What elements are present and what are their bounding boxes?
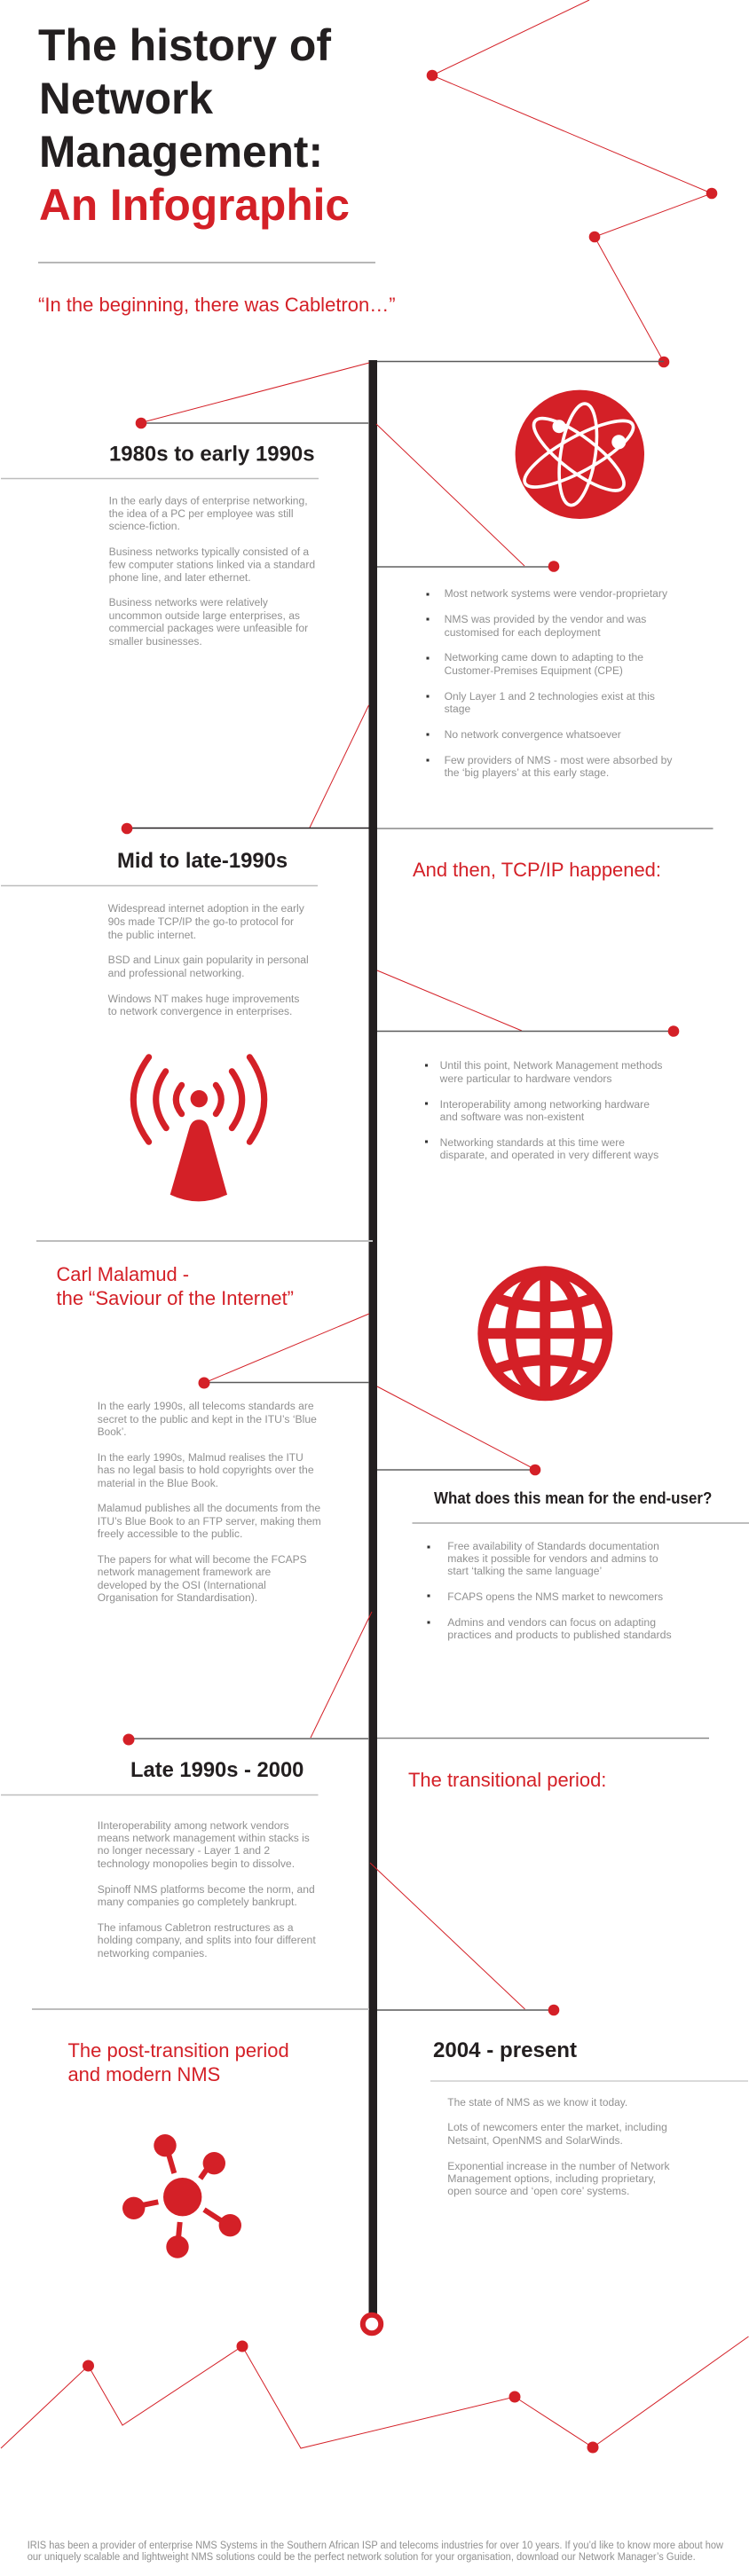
text block: Netsaint, OpenNMS and SolarWinds.: [447, 2136, 623, 2147]
heading: [67, 2039, 289, 2085]
heading: Mid to late-1990s: [117, 849, 288, 873]
title: [38, 20, 350, 230]
text block: means network management within stacks is: [98, 1834, 310, 1844]
bullet list: NMS was provided by the vendor and was: [445, 615, 647, 625]
text block: The infamous Cabletron restructures as a: [98, 1923, 294, 1934]
panel: Carl Malamud: [36, 1241, 373, 1604]
text block: science-fiction.: [109, 522, 180, 532]
icon: network hub: [122, 2134, 241, 2258]
central timeline bar: [369, 360, 377, 2314]
text block: In the early 1990s, Malmud realises the ITU: [98, 1453, 304, 1464]
text block: BSD and Linux gain popularity in personal: [108, 955, 309, 966]
timeline end ring: [363, 2315, 381, 2333]
text block: Lots of newcomers enter the market, including: [447, 2123, 667, 2133]
heading: 2004 - present: [433, 2038, 577, 2062]
bullet list: [425, 1061, 663, 1161]
panel: The post-transition period: [32, 2009, 369, 2258]
text block: Spinoff NMS platforms become the norm, and: [98, 1885, 315, 1896]
bullet list: customised for each deployment: [445, 628, 601, 639]
text block: phone line, and later ethernet.: [109, 573, 251, 584]
text block: Exponential increase in the number of Network: [447, 2162, 670, 2172]
text block: network management framework are: [98, 1567, 271, 1578]
text block: Business networks were relatively: [109, 598, 268, 609]
text block: material in the Blue Book.: [98, 1479, 218, 1489]
bullet list: practices and products to published standards: [447, 1630, 672, 1641]
text block: Book’.: [98, 1427, 127, 1438]
text block: developed by the OSI (International: [98, 1581, 266, 1591]
panel: What does this mean for the end-user?: [377, 1386, 749, 1641]
text block: Widespread internet adoption in the early: [108, 904, 304, 915]
bullet list: Free availability of Standards documentation: [447, 1542, 659, 1552]
text block: [447, 2098, 670, 2197]
text block: smaller businesses.: [109, 637, 202, 648]
heading: The post-transition period: [67, 2039, 289, 2062]
text block: has no legal basis to hold copyrights over the: [98, 1465, 314, 1476]
connector: timeline start: [136, 362, 664, 428]
text block: In the early days of enterprise networking,: [109, 496, 308, 507]
icon: atom: [516, 390, 644, 519]
text block: In the early 1990s, all telecoms standards are: [98, 1402, 314, 1412]
text block: open source and ‘open core’ systems.: [447, 2187, 629, 2197]
bullet list: Few providers of NMS - most were absorbed by: [445, 756, 673, 766]
text block: [108, 904, 309, 1017]
footer text: [28, 2541, 724, 2563]
text block: [109, 496, 315, 648]
panel: The transitional period: [370, 1739, 709, 2015]
bullet list: Until this point, Network Management methods: [440, 1061, 663, 1072]
bullet list: Customer-Premises Equipment (CPE): [445, 666, 623, 677]
text block: Organisation for Standardisation).: [98, 1593, 257, 1604]
text block: ITU’s Blue Book to an FTP server, making them: [98, 1517, 321, 1528]
text block: 90s made TCP/IP the go-to protocol for: [108, 917, 294, 928]
connector: [377, 970, 679, 1037]
text block: the public internet.: [108, 931, 196, 941]
text block: holding company, and splits into four different: [98, 1936, 317, 1946]
heading: Carl Malamud -: [57, 1263, 189, 1285]
footer text: our uniquely scalable and lightweight NMS solutions could be the perfect network solution for your organisation, download our Network Manager’s Guide.: [28, 2552, 696, 2563]
connector: [376, 424, 559, 572]
text block: freely accessible to the public.: [98, 1529, 242, 1540]
bullet list: Networking standards at this time were: [440, 1138, 625, 1149]
text block: networking companies.: [98, 1949, 208, 1959]
heading: The transitional period:: [408, 1769, 606, 1791]
bullet list: were particular to hardware vendors: [439, 1074, 612, 1085]
text block: Windows NT makes huge improvements: [108, 994, 300, 1005]
bullet list: [428, 1542, 672, 1641]
text block: Management options, including proprietary,: [447, 2174, 656, 2185]
panel: 2004 - present: [430, 2038, 748, 2197]
heading: Late 1990s - 2000: [130, 1758, 304, 1782]
connector: [122, 1612, 372, 1746]
text block: Malamud publishes all the documents from the: [98, 1504, 320, 1514]
bullet list: Only Layer 1 and 2 technologies exist at this: [445, 692, 655, 703]
text block: few computer stations linked via a standard: [109, 560, 315, 570]
footer text: IRIS has been a provider of enterprise NMS Systems in the Southern African ISP and telecoms industries for over 10 years. If you’d like to know more about how: [28, 2541, 724, 2551]
text block: [98, 1402, 321, 1604]
text block: [98, 1821, 317, 1959]
icon: globe: [477, 1266, 612, 1401]
bullet list: FCAPS opens the NMS market to newcomers: [447, 1592, 663, 1603]
panel: early network facts: [376, 424, 673, 779]
heading: What does this mean for the end-user?: [434, 1489, 712, 1507]
text block: no longer necessary - Layer 1 and 2: [98, 1846, 270, 1857]
connector: [370, 1863, 559, 2015]
heading: the “Saviour of the Internet”: [57, 1287, 294, 1309]
intro quote: “In the beginning, there was Cabletron…”: [38, 294, 396, 316]
bullet list: Interoperability among networking hardware: [440, 1100, 650, 1111]
text block: The state of NMS as we know it today.: [447, 2098, 627, 2109]
text block: IInteroperability among network vendors: [98, 1821, 289, 1832]
bullet list: and software was non-existent: [440, 1112, 585, 1123]
heading: and modern NMS: [67, 2063, 220, 2085]
bullet list: Admins and vendors can focus on adapting: [447, 1618, 656, 1629]
bullet list: the ‘big players’ at this early stage.: [445, 768, 609, 779]
icon: radio tower: [133, 1057, 264, 1201]
text block: Business networks typically consisted of a: [109, 547, 310, 558]
decorative network line: top right: [427, 0, 717, 367]
text block: secret to the public and kept in the ITU’s ‘Blue: [98, 1415, 317, 1425]
text block: and professional networking.: [108, 969, 244, 979]
text block: many companies go completely bankrupt.: [98, 1897, 297, 1908]
connector: [377, 1386, 540, 1475]
bullet list: [426, 589, 673, 779]
panel: And then, TCP/IP happened: [377, 829, 714, 1161]
connector: [199, 1314, 369, 1389]
title: The history of: [38, 20, 331, 70]
text block: the idea of a PC per employee was still: [109, 509, 293, 520]
heading: 1980s to early 1990s: [109, 442, 314, 467]
title: Management:: [39, 127, 323, 177]
text block: commercial packages were unfeasible for: [109, 624, 308, 634]
text block: The papers for what will become the FCAPS: [98, 1555, 307, 1566]
bullet list: disparate, and operated in very different ways: [440, 1151, 658, 1161]
heading: And then, TCP/IP happened:: [413, 859, 661, 881]
text block: uncommon outside large enterprises, as: [109, 611, 300, 622]
bullet list: start ‘talking the same language’: [447, 1567, 602, 1577]
connector: [122, 705, 369, 834]
title: An Infographic: [39, 180, 350, 230]
bullet list: Networking came down to adapting to the: [445, 653, 643, 664]
bullet list: No network convergence whatsoever: [445, 730, 621, 741]
text block: technology monopolies begin to dissolve.: [98, 1859, 295, 1870]
panel: mid to late-1990s: [1, 705, 369, 1201]
bullet list: stage: [445, 704, 470, 715]
bullet list: makes it possible for vendors and admins to: [447, 1554, 658, 1565]
title: Network: [39, 74, 213, 123]
bullet list: Most network systems were vendor-proprietary: [445, 589, 667, 600]
heading: [57, 1263, 294, 1309]
decorative network line: bottom: [1, 2336, 749, 2454]
text block: to network convergence in enterprises.: [108, 1007, 292, 1017]
panel: 1980s to early 1990s: [1, 362, 664, 648]
panel: Late 1990s - 2000: [1, 1612, 372, 1959]
